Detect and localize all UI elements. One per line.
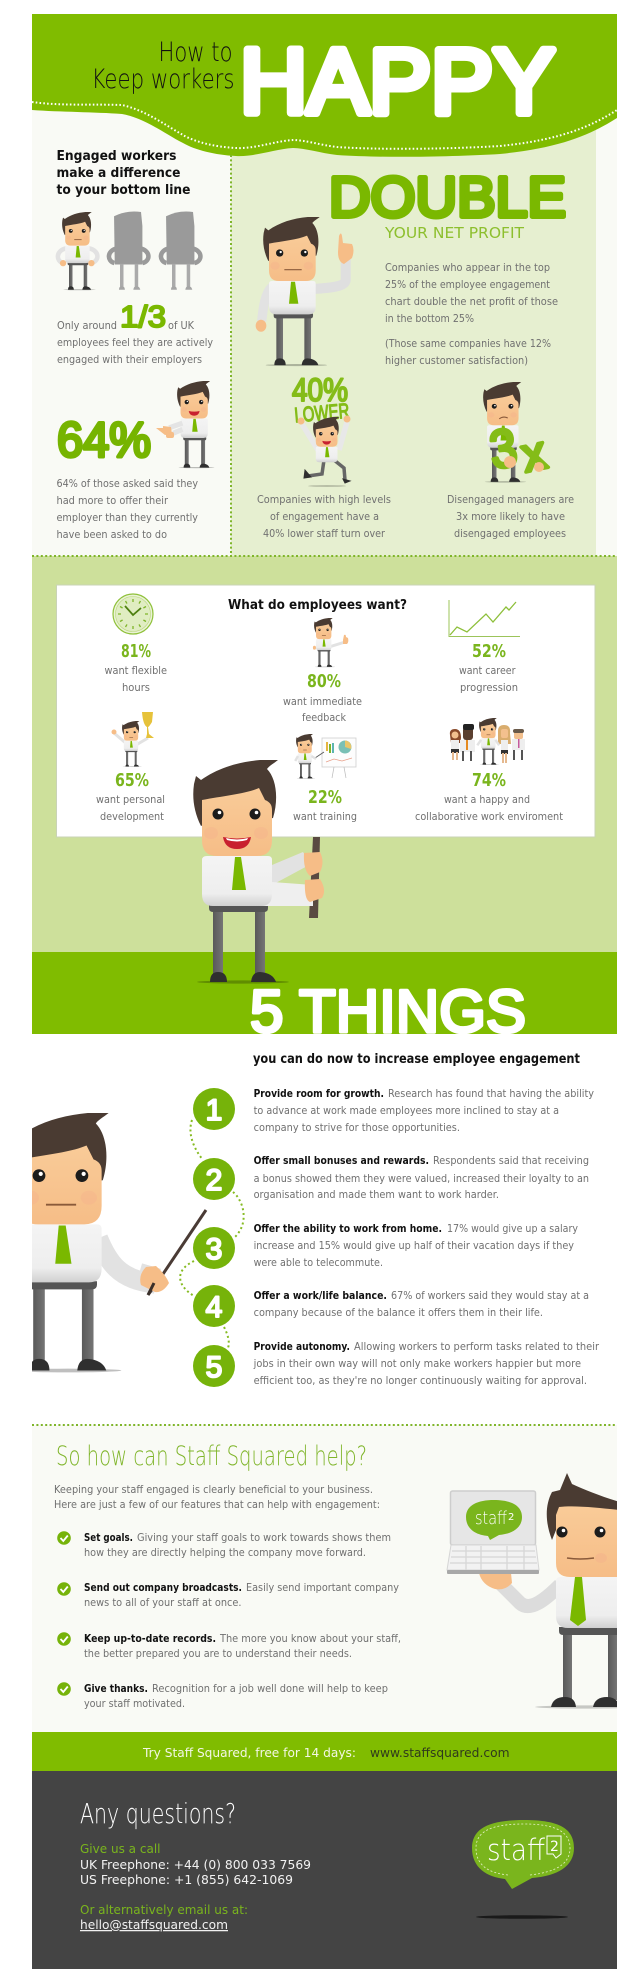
- header: [32, 14, 617, 157]
- vertical dotted divider: [230, 155, 232, 556]
- text: 40 percent lower: 40% lower staff turn over: [263, 527, 385, 540]
- text: small bonuses and rewards: Respondents said that receiving: [433, 1154, 589, 1167]
- text: email: [80, 1902, 248, 1932]
- feature: give thanks: Recognition for a job well done will help to keep: [152, 1682, 388, 1695]
- stat: 22 percent training: [293, 787, 357, 823]
- feature: set goals: Giving your staff goals to work towards shows them: [137, 1531, 391, 1544]
- text: phone numbers: US Freephone: +1 (855) 642-1069: [80, 1872, 293, 1887]
- laptop: [447, 1491, 539, 1574]
- title: happy: HAPPY: [240, 31, 555, 133]
- icon: feedback man: [313, 618, 348, 667]
- icon: number 2: [193, 1158, 235, 1200]
- panel: right background: [231, 90, 596, 556]
- icon: engaged man: [58, 212, 97, 290]
- icon: man holding laptop: [447, 1473, 635, 1709]
- text: provide room for growth: to advance at work made employees more inclined to stay at a: [254, 1104, 559, 1117]
- feature: up to date records: the better prepared you are to understand their needs.: [84, 1647, 352, 1660]
- step 5: [193, 1340, 599, 1387]
- text: double net profit explanation: (Those same companies have 12%: [385, 337, 551, 350]
- text: disengaged managers: 3x more likely to have: [456, 510, 565, 523]
- heading: engaged workers: make a difference: [56, 165, 180, 181]
- feature: company broadcasts: news to all of your staff at once.: [84, 1596, 242, 1609]
- stat: 74 percent happy work environment: [415, 770, 564, 823]
- text: work life balance: company because of the balance it offers them in their life.: [254, 1306, 543, 1319]
- stat: 74 percent happy work environment: want a happy and: [444, 793, 530, 806]
- icon: man with 40% lower: LOWER: [294, 400, 350, 427]
- header shape: [32, 14, 617, 157]
- text: small bonuses and rewards: a bonus showed them they were valued, increased their loyalty to an: [254, 1172, 589, 1185]
- icon: rising line chart: [449, 600, 520, 636]
- heading: engaged workers: [56, 148, 190, 198]
- feature: company broadcasts: [57, 1581, 399, 1609]
- text: double net profit explanation: [385, 261, 558, 367]
- feature: give thanks: [57, 1682, 388, 1710]
- icon: man with trophy: [112, 712, 154, 767]
- logo shadow: [476, 1915, 568, 1919]
- stat: 65 percent personal development: want personal: [96, 793, 165, 806]
- laptop: 2: [508, 1512, 514, 1523]
- panel: contact: [80, 1797, 574, 1932]
- feature: up to date records: The more you know about your staff,: [219, 1632, 401, 1645]
- text: provide room for growth: [254, 1087, 594, 1134]
- stat: one third: of UK: [168, 319, 195, 332]
- step 1: [193, 1087, 594, 1134]
- banner: try staff squared: [142, 1745, 509, 1760]
- banner: try staff squared: Try Staff Squared, free for 14 days:: [142, 1745, 356, 1760]
- stat: 74 percent happy work environment: collaborative work enviroment: [415, 810, 564, 823]
- feature: up to date records: Keep up-to-date records.: [84, 1632, 216, 1645]
- icon: man with 40% lower: [292, 372, 350, 487]
- laptop: staff: [475, 1508, 507, 1529]
- stat: 65 percent personal development: [96, 770, 165, 823]
- text: 64 percent detail: have been asked to do: [56, 528, 167, 541]
- stat: 64 percent: 64%: [57, 414, 151, 468]
- text: provide autonomy: Provide autonomy.: [254, 1340, 350, 1353]
- logo: staff squared bubble: [472, 1820, 574, 1919]
- panel: employee wants background: [32, 556, 617, 952]
- text: 64 percent detail: [56, 477, 198, 541]
- icon: man with pointer stick: [32, 1113, 208, 1372]
- stat: 65 percent personal development: 65%: [115, 770, 149, 791]
- heading: double: DOUBLE: [329, 166, 566, 230]
- stat: 52 percent career progression: want career: [459, 664, 516, 677]
- icon: check: [57, 1582, 71, 1596]
- feature: company broadcasts: Send out company broadcasts.: [84, 1581, 242, 1594]
- text: 40 percent lower: [257, 493, 391, 540]
- panel: free trial banner: [32, 1732, 617, 1771]
- steps connector dotted line: [180, 1120, 244, 1348]
- stat: one third: employees feel they are actively: [57, 336, 213, 349]
- panel: 5 things band: [32, 952, 617, 1034]
- step 2: [193, 1154, 589, 1201]
- text: small bonuses and rewards: [254, 1154, 589, 1201]
- icon: check: [57, 1531, 71, 1545]
- icon: team group: [450, 718, 525, 765]
- step 3: [193, 1222, 578, 1269]
- text: provide autonomy: efficient too, as they're no longer continuously waiting for approval.: [254, 1374, 587, 1387]
- text: disengaged managers: disengaged employees: [454, 527, 566, 540]
- text: phone numbers: [80, 1841, 311, 1887]
- icon: check: [57, 1632, 71, 1646]
- stat: 81 percent flexible hours: 81%: [121, 641, 151, 662]
- panel: how staff squared helps: [54, 1441, 635, 1710]
- text: intro: Here are just a few of our features that can help with engagement:: [54, 1498, 380, 1511]
- stat: 81 percent flexible hours: want flexible: [104, 664, 167, 677]
- text: work from home: Offer the ability to work from home.: [254, 1222, 442, 1235]
- text: provide room for growth: Provide room for growth.: [254, 1087, 384, 1100]
- heading: 5 things: 5 THINGS: [250, 978, 526, 1045]
- icon: number 5: 5: [206, 1351, 222, 1384]
- feature: give thanks: your staff motivated.: [84, 1697, 185, 1710]
- icon: number 5: [193, 1345, 235, 1387]
- stat: 22 percent training: 22%: [308, 787, 342, 808]
- panel: what do employees want card: [56, 585, 595, 837]
- text: work life balance: Offer a work/life balance.: [254, 1289, 387, 1302]
- banner: try staff squared: www.staffsquared.com: [370, 1745, 510, 1760]
- text: small bonuses and rewards: organisation and made them want to work harder.: [254, 1188, 499, 1201]
- icon: clock: [113, 594, 153, 634]
- icon: man holding 3x: 3: [486, 417, 521, 481]
- icon: number 4: [193, 1285, 235, 1327]
- stat: 81 percent flexible hours: [104, 641, 167, 694]
- text: disengaged managers: Disengaged managers are: [447, 493, 574, 506]
- icon: man holding card: [193, 760, 324, 984]
- icon: grey silhouette: [109, 211, 148, 290]
- heading: what do employees want: What do employees want?: [228, 597, 407, 613]
- text: 64 percent detail: 64% of those asked said they: [56, 477, 198, 490]
- feature: set goals: Set goals.: [84, 1531, 133, 1544]
- text: provide autonomy: jobs in their own way will not only make workers happier but more: [253, 1357, 581, 1370]
- stat: 80 percent immediate feedback: feedback: [302, 711, 347, 724]
- text: work from home: 17% would give up a salary: [447, 1222, 578, 1235]
- text: phone numbers: Give us a call: [80, 1841, 160, 1856]
- text: 64 percent detail: employer than they currently: [56, 511, 198, 524]
- horizontal dotted divider: [32, 555, 617, 557]
- text: provide autonomy: Allowing workers to perform tasks related to their: [354, 1340, 599, 1353]
- icon: number 4: 4: [206, 1291, 222, 1324]
- panel: left background: [32, 90, 231, 556]
- icon: number 3: 3: [206, 1233, 222, 1266]
- stat: one third: [57, 299, 213, 366]
- text: phone numbers: UK Freephone: +44 (0) 800 033 7569: [80, 1857, 311, 1872]
- text: email: hello@staffsquared.com: [80, 1917, 228, 1932]
- stat: 80 percent immediate feedback: [283, 671, 362, 724]
- text: double net profit explanation: higher customer satisfaction): [385, 354, 528, 367]
- text: provide room for growth: company to strive for those opportunities.: [254, 1121, 460, 1134]
- logo: staff squared bubble: 2: [550, 1839, 559, 1855]
- text: provide autonomy: [253, 1340, 599, 1387]
- text: small bonuses and rewards: Offer small bonuses and rewards.: [254, 1154, 429, 1167]
- icon: man holding 3x: [483, 382, 551, 483]
- title: keep workers: Keep workers: [92, 64, 234, 95]
- panel: engaged workers: [56, 148, 214, 541]
- icon: man with 40% lower: 40%: [292, 372, 348, 408]
- stat: 52 percent career progression: [459, 641, 518, 694]
- dotted divider above staff squared: [32, 1424, 617, 1426]
- text: work from home: were able to telecommute.: [254, 1256, 383, 1269]
- stat: 22 percent training: want training: [293, 810, 357, 823]
- heading: engaged workers: to your bottom line: [56, 182, 190, 198]
- title: how to: How to: [158, 37, 232, 68]
- icon: number 1: [193, 1088, 235, 1130]
- panel: double net profit: [256, 166, 574, 540]
- text: 40 percent lower: Companies with high levels: [257, 493, 391, 506]
- text: email: Or alternatively email us at:: [80, 1902, 248, 1917]
- text: work from home: increase and 15% would give up half of their vacation days if they: [254, 1239, 574, 1252]
- feature: up to date records: [57, 1632, 401, 1660]
- stat: one third: Only around: [57, 319, 117, 332]
- step 4: [193, 1285, 589, 1327]
- text: double net profit explanation: chart double the net profit of those: [385, 295, 558, 308]
- text: intro: [54, 1483, 380, 1511]
- subheading: your net profit: YOUR NET PROFIT: [384, 224, 525, 242]
- stat: one third: engaged with their employers: [57, 353, 202, 366]
- feature: give thanks: Give thanks.: [84, 1682, 148, 1695]
- icon: number 1: 1: [206, 1094, 222, 1127]
- icon: man pointing up: [256, 217, 354, 366]
- icon: training man with board: [295, 734, 356, 779]
- stat: 81 percent flexible hours: hours: [122, 681, 150, 694]
- text: work life balance: 67% of workers said they would stay at a: [391, 1289, 589, 1302]
- text: 40 percent lower: of engagement have a: [270, 510, 379, 523]
- stat: 80 percent immediate feedback: 80%: [307, 671, 341, 692]
- icon: man holding 3x: x: [517, 426, 551, 483]
- text: intro: Keeping your staff engaged is clearly beneficial to your business.: [54, 1483, 373, 1496]
- icon: number 2: 2: [206, 1164, 222, 1197]
- heading: any questions: Any questions?: [80, 1797, 236, 1830]
- text: double net profit explanation: Companies who appear in the top: [385, 261, 550, 274]
- feature: set goals: how they are directly helping the company move forward.: [84, 1546, 366, 1559]
- icon: grey silhouette: [161, 211, 200, 290]
- stat: 52 percent career progression: progression: [460, 681, 518, 694]
- text: 64 percent detail: had more to offer their: [56, 494, 168, 507]
- text: double net profit explanation: 25% of the employee engagement: [385, 278, 551, 291]
- panel: right margin: [596, 90, 617, 556]
- panel: staff squared background: [32, 1425, 617, 1732]
- heading: engaged workers: Engaged workers: [56, 148, 176, 164]
- stat: 74 percent happy work environment: 74%: [472, 770, 506, 791]
- stat: 80 percent immediate feedback: want immediate: [283, 695, 362, 708]
- subheading: increase employee engagement: you can do now to increase employee engagement: [253, 1051, 580, 1067]
- icon: check: [57, 1682, 71, 1696]
- text: work life balance: [254, 1289, 589, 1319]
- stat: 52 percent career progression: 52%: [472, 641, 506, 662]
- heading: so how can staff squared help: So how can Staff Squared help?: [56, 1441, 367, 1472]
- text: disengaged managers: [447, 493, 574, 540]
- text: work from home: [254, 1222, 578, 1269]
- icon: number 3: [193, 1227, 235, 1269]
- logo: staff squared bubble: staff: [487, 1833, 545, 1867]
- text: provide room for growth: Research has found that having the ability: [388, 1087, 594, 1100]
- text: double net profit explanation: in the bottom 25%: [385, 312, 474, 325]
- feature: set goals: [57, 1531, 391, 1559]
- icon: pointing man: [156, 381, 214, 468]
- feature: company broadcasts: Easily send important company: [246, 1581, 399, 1594]
- panel: contact footer: [32, 1771, 617, 1969]
- stat: one third: 1/3: [120, 299, 166, 334]
- stat: 65 percent personal development: development: [100, 810, 165, 823]
